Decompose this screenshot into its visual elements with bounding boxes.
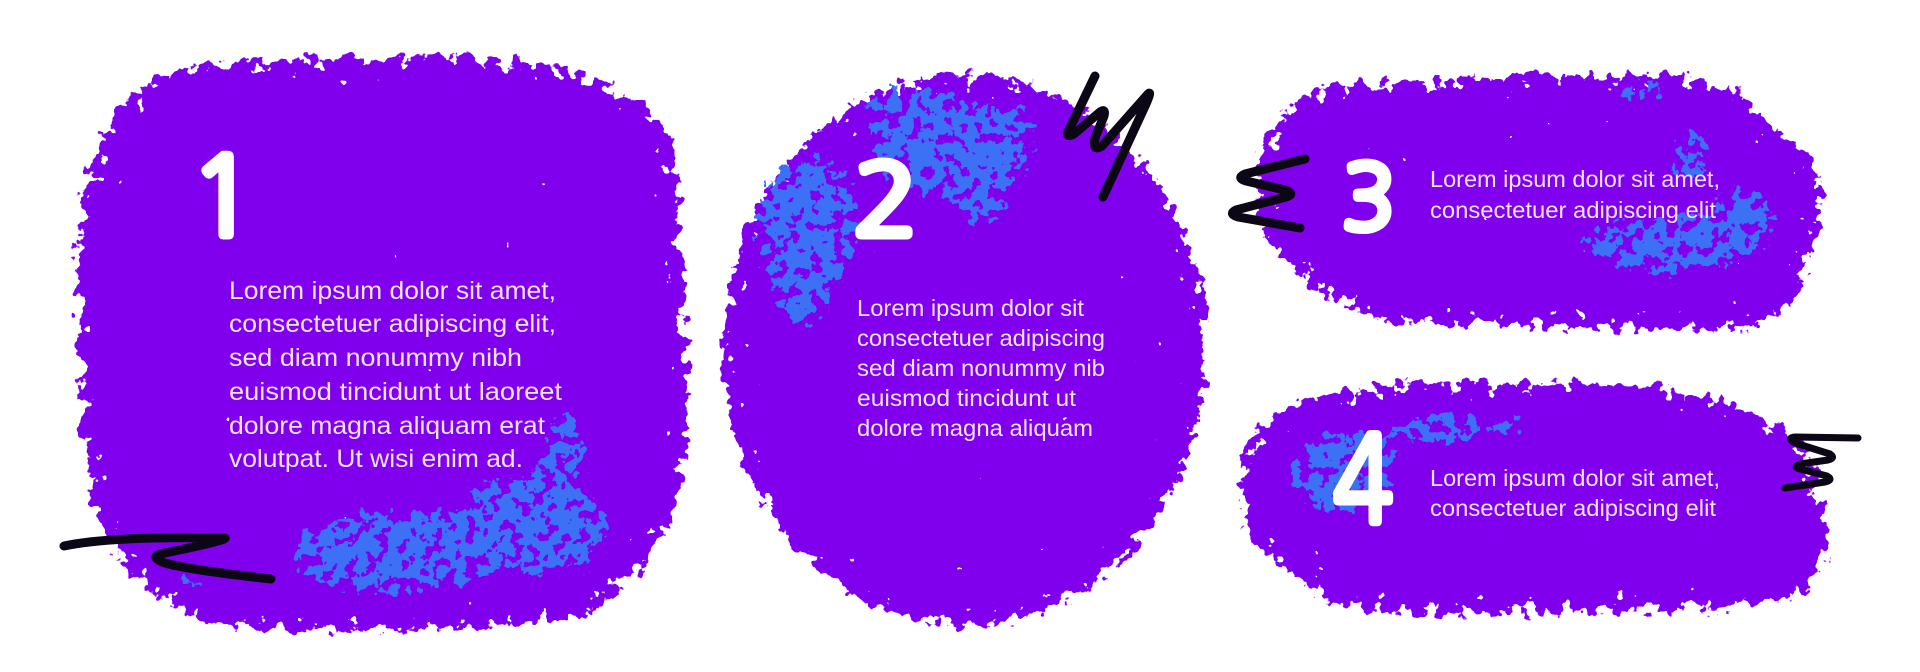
text block 3: consectetuer adipiscing elit [1430,197,1717,223]
number 1: 1 [190,143,255,251]
scribble 4 [1785,437,1858,488]
panel 1: rounded square brush block [64,59,686,629]
number 2: 2 [853,151,918,249]
blue texture 1 [160,400,615,600]
brush shape 4 [1240,384,1830,612]
brush shape 2 [725,76,1205,624]
scribble 2 [1068,76,1150,197]
text block 3 [1430,166,1720,223]
text block 1: euismod tincidunt ut laoreet [229,378,562,406]
text block 1: sed diam nonummy nibh [229,344,522,372]
text block 1 [229,277,562,473]
number 3: 3 [1342,154,1395,242]
text block 2: euismod tincidunt ut [857,385,1077,411]
text block 2: sed diam nonummy nib [857,355,1105,381]
text block 2: consectetuer adipiscing [857,325,1105,351]
text block 3: Lorem ipsum dolor sit amet, [1430,166,1720,192]
blue texture 4 [1284,406,1548,522]
text block 4: Lorem ipsum dolor sit amet, [1430,465,1720,491]
scribble 1 [64,538,271,579]
blue texture 3 [1570,76,1783,279]
text block 1: consectetuer adipiscing elit, [229,310,556,338]
brush shape 1 [80,59,686,629]
text block 2: Lorem ipsum dolor sit [857,295,1085,321]
panel 3: wide brush block [1232,76,1824,328]
text block 4 [1430,465,1720,521]
number 4: 4 [1333,421,1393,539]
panel 4: wide brush block [1240,384,1858,612]
blue texture 2 [750,82,1055,336]
text block 1: dolore magna aliquam erat [229,412,545,440]
text block 1: volutpat. Ut wisi enim ad. [229,445,523,473]
text block 2 [857,295,1105,441]
text block 2: dolore magna aliquam [857,415,1093,441]
text block 1: Lorem ipsum dolor sit amet, [229,277,556,305]
panel 2: round brush block [725,76,1205,624]
scribble 3 [1232,159,1305,228]
text block 4: consectetuer adipiscing elit [1430,495,1717,521]
brush shape 3 [1256,76,1824,328]
